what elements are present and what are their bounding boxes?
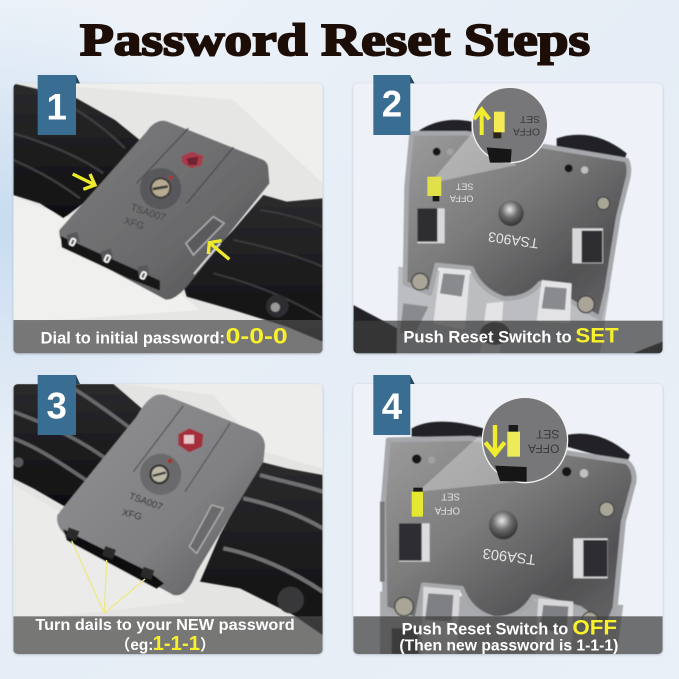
arrow: up [474, 109, 489, 135]
small reset switch: SET [441, 491, 460, 502]
arrow: left arrow [73, 174, 95, 189]
caption bar: Push Reset Switch to [402, 620, 568, 638]
flipped engraved model label: TSA903 [482, 545, 536, 567]
title: Password Reset Steps [80, 14, 590, 65]
caption bar [353, 615, 663, 654]
magnifier callout: OFFA [528, 442, 559, 456]
photo: step 4 back plate [380, 422, 634, 654]
magnifier callout: OFFA [513, 126, 540, 137]
badge: number 2 [373, 75, 415, 135]
caption bar [13, 320, 323, 353]
panel: step 1 [13, 75, 323, 353]
caption bar: （eg: [115, 637, 153, 654]
caption bar: 0-0-0 [226, 323, 288, 348]
badge: number 4 [373, 375, 415, 435]
flipped engraved model label: TSA903 [487, 229, 539, 252]
magnifier callout: SET [519, 113, 540, 124]
panel: step 4 [353, 375, 663, 654]
caption bar: Turn dails to your NEW password [35, 617, 295, 634]
caption bar: OFF [572, 615, 617, 639]
photo: step 3 lock on strap: XFG [121, 507, 143, 523]
panel: step 2 [353, 75, 663, 353]
magnifier callout: SET [535, 427, 559, 441]
badge: number 1: 1 [46, 86, 67, 127]
badge: number 3: 3 [46, 385, 67, 426]
badge: number 2: 2 [382, 84, 402, 125]
small reset switch: OFFA [450, 193, 473, 203]
arrow: right arrow [208, 241, 229, 259]
caption bar: 1-1-1 [153, 633, 200, 655]
caption bar: ） [200, 637, 215, 654]
small reset switch [412, 488, 460, 517]
photo: step 1 lock on strap [13, 83, 323, 342]
arrow: down [485, 425, 505, 454]
photo: step 1 lock on strap: TSA007 [129, 202, 167, 224]
photo: step 3 lock on strap: TSA007 [127, 491, 164, 513]
photo: step 1 lock on strap: XFG [122, 216, 146, 233]
caption bar [353, 321, 663, 353]
small reset switch: OFFA [434, 505, 460, 516]
pointer lines to the dials [72, 541, 145, 613]
photo: step 2 back plate [353, 120, 663, 353]
caption bar [13, 616, 323, 655]
magnifier callout [482, 397, 568, 483]
badge: number 4: 4 [382, 386, 403, 427]
caption bar: (Then new password is 1-1-1) [399, 637, 618, 654]
caption bar: Dial to initial password: [41, 328, 225, 347]
photo: step 3 lock on strap [13, 384, 323, 635]
small reset switch [427, 177, 473, 203]
panel: step 3 [13, 375, 323, 655]
badge: number 3 [38, 375, 80, 435]
caption bar: SET [575, 324, 619, 348]
small reset switch: SET [455, 181, 473, 191]
caption bar: Push Reset Switch to [403, 329, 572, 347]
badge: number 1 [38, 75, 80, 135]
magnifier callout [472, 87, 548, 163]
